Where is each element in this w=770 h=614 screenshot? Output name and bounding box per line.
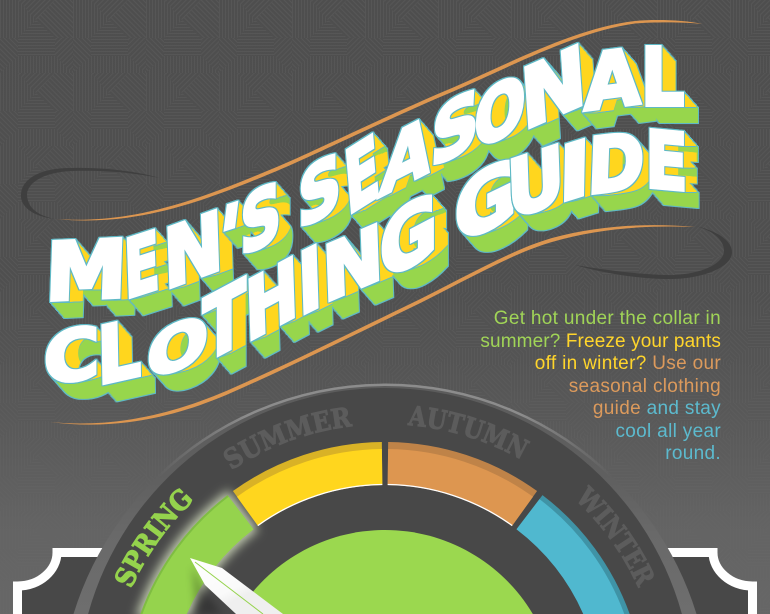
- intro paragraph: Get hot under the collar in: [494, 308, 721, 329]
- summer segment: [246, 464, 382, 526]
- centre green disc: [237, 530, 533, 614]
- intro paragraph: round.: [665, 443, 721, 464]
- title line 2: CLOTHING GUIDE: H: [244, 240, 300, 362]
- banner ribbon left dark loop: [21, 168, 160, 219]
- intro paragraph: [480, 308, 721, 464]
- title line 2: CLOTHING GUIDE: G: [380, 174, 437, 302]
- title line 2: CLOTHING GUIDE: N: [321, 208, 385, 321]
- title line 1: MEN'S SEASONAL: N: [162, 193, 225, 309]
- intro paragraph: guide and stay: [593, 398, 721, 419]
- title line 2: CLOTHING GUIDE: C: [44, 312, 99, 402]
- title line 2: CLOTHING GUIDE: [44, 113, 688, 403]
- title line 1: MEN'S SEASONAL: E: [341, 117, 383, 236]
- banner ribbon bottom orange line: [50, 225, 695, 425]
- spring segment glow: [140, 495, 254, 614]
- spring segment: [140, 495, 254, 614]
- label: autumn: AUTUMN: [407, 406, 530, 459]
- title line 1: MEN'S SEASONAL: L: [641, 32, 684, 124]
- title line 2: CLOTHING GUIDE: D: [586, 116, 646, 213]
- autumn segment: [388, 464, 524, 526]
- title line 1: MEN'S SEASONAL: ': [211, 184, 245, 291]
- title line 2: CLOTHING GUIDE: E: [645, 113, 688, 209]
- title line 1: MEN'S SEASONAL: S: [429, 70, 481, 188]
- intro paragraph: summer? Freeze your pants: [480, 331, 721, 352]
- label: winter: WINTER: [578, 484, 654, 588]
- title line 1: MEN'S SEASONAL: O: [472, 56, 528, 168]
- right ticket corner: [650, 552, 752, 614]
- title line 2: CLOTHING GUIDE: O: [144, 300, 211, 396]
- season dial: [74, 384, 696, 614]
- title line 2: CLOTHING GUIDE: G: [455, 139, 517, 265]
- title line 1: MEN'S SEASONAL: E: [123, 213, 161, 317]
- title line 2: CLOTHING GUIDE: U: [505, 127, 566, 237]
- intro paragraph: off in winter? Use our: [535, 353, 721, 374]
- title line 2: CLOTHING GUIDE: I: [558, 124, 591, 221]
- needle: [190, 558, 283, 614]
- title line 1: MEN'S SEASONAL: N: [518, 27, 589, 150]
- left ticket corner: [18, 552, 120, 614]
- title line 2: CLOTHING GUIDE: I: [297, 227, 323, 336]
- intro paragraph: cool all year: [615, 421, 721, 442]
- intro paragraph: seasonal clothing: [569, 376, 721, 397]
- title line 1: MEN'S SEASONAL: A: [376, 97, 437, 217]
- title line 1: MEN'S SEASONAL: A: [584, 31, 640, 129]
- title line 2: CLOTHING GUIDE: L: [97, 303, 142, 403]
- dial outer rim: [74, 384, 696, 614]
- dial dark disc: [88, 388, 682, 614]
- title: Men's Seasonal Clothing Guide: [44, 27, 688, 403]
- title line 1: MEN'S SEASONAL: S: [240, 164, 281, 275]
- title line 1: MEN'S SEASONAL: [44, 27, 684, 320]
- label: summer: SUMMER: [224, 407, 353, 469]
- winter segment: [516, 495, 630, 614]
- title line 1: MEN'S SEASONAL: S: [298, 135, 341, 249]
- label: spring: SPRING: [115, 488, 192, 588]
- banner ribbon right dark loop: [575, 226, 732, 279]
- title line 1: MEN'S SEASONAL: M: [44, 224, 128, 320]
- title line 2: CLOTHING GUIDE: T: [203, 260, 246, 384]
- banner ribbon top orange line: [55, 20, 702, 220]
